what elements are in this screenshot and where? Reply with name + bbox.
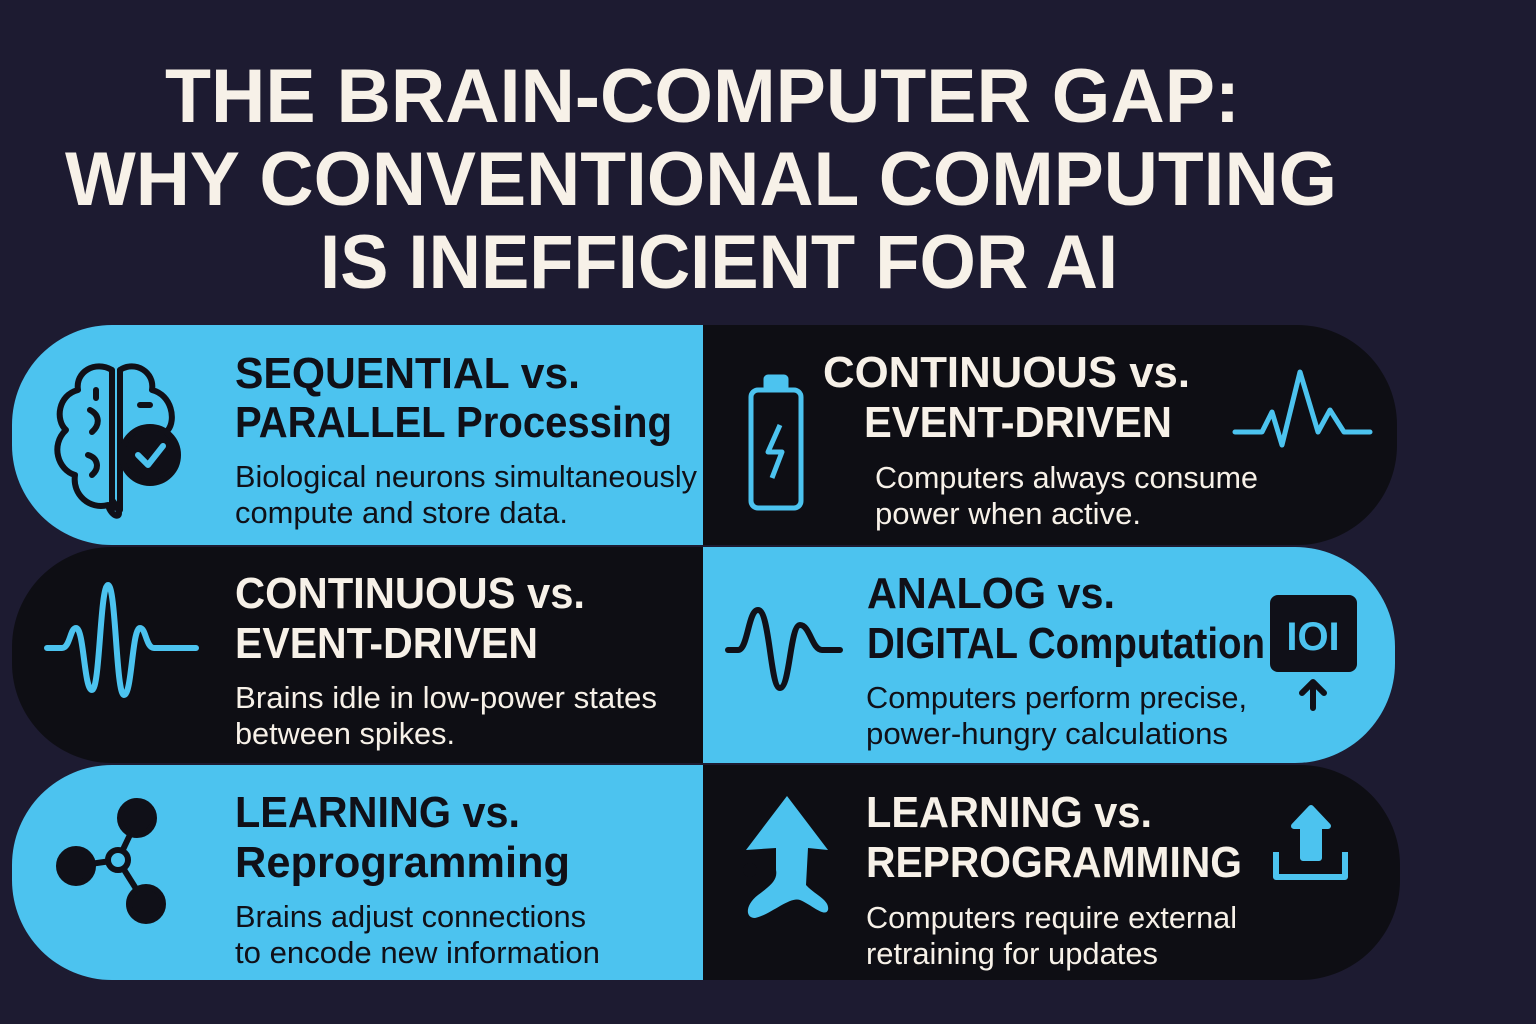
panel: continuous vs event-driven (brains): between spikes. [235, 716, 455, 751]
panel: learning vs reprogramming (computers): REPROGRAMMING [866, 838, 1242, 887]
title [65, 54, 1337, 305]
icon: upload [1276, 808, 1345, 877]
heading: SEQUENTIAL vs. [235, 349, 580, 398]
icon: battery [751, 377, 801, 508]
title: IS INEFFICIENT FOR AI [320, 220, 1118, 305]
body text: Computers always consume [875, 460, 1258, 495]
icon: spike wave [47, 585, 196, 695]
panel: continuous vs event-driven (computers) [703, 325, 1397, 545]
heading: CONTINUOUS vs. [235, 569, 585, 618]
icon: analog wave [728, 610, 840, 688]
heading: LEARNING vs. [866, 788, 1152, 837]
panel: sequential vs parallel: compute and store data. [235, 495, 568, 530]
title: WHY CONVENTIONAL COMPUTING [65, 137, 1337, 222]
icon: pulse [1235, 372, 1370, 445]
panel: learning vs reprogramming (computers) [703, 765, 1400, 980]
icon: brain with check [57, 366, 178, 516]
icon: neuron blob [743, 796, 828, 918]
body text: Computers require external [866, 900, 1237, 935]
heading: CONTINUOUS vs. [823, 348, 1190, 397]
panel: learning vs reprogramming (computers): retraining for updates [866, 936, 1158, 971]
panel: learning vs reprogramming (brains) [12, 765, 703, 980]
panel: analog vs digital: DIGITAL Computation [867, 619, 1265, 668]
body text: Brains idle in low-power states [235, 680, 657, 715]
title: THE BRAIN-COMPUTER GAP: [165, 54, 1240, 139]
icon: network nodes [59, 801, 163, 921]
panel: continuous vs event-driven (brains) [12, 547, 703, 763]
panel: learning vs reprogramming (brains): to encode new information [235, 935, 600, 970]
panel: continuous vs event-driven (computers): EVENT-DRIVEN [864, 398, 1172, 447]
heading: LEARNING vs. [235, 788, 520, 837]
heading: ANALOG vs. [867, 569, 1115, 618]
panel: sequential vs parallel: PARALLEL Processing [235, 398, 672, 447]
panel: continuous vs event-driven (computers): power when active. [875, 496, 1141, 531]
icon: binary chip: IOI [1286, 615, 1340, 659]
panel: learning vs reprogramming (brains): Reprogramming [235, 838, 570, 887]
panel: analog vs digital [703, 547, 1395, 763]
panel: continuous vs event-driven (brains): EVENT-DRIVEN [235, 619, 538, 668]
icon: binary chip [1270, 595, 1357, 708]
body text: Computers perform precise, [866, 680, 1247, 715]
body text: Biological neurons simultaneously [235, 459, 697, 494]
body text: Brains adjust connections [235, 899, 586, 934]
panel: sequential vs parallel [12, 325, 703, 545]
panel: analog vs digital: power-hungry calculations [866, 716, 1228, 751]
